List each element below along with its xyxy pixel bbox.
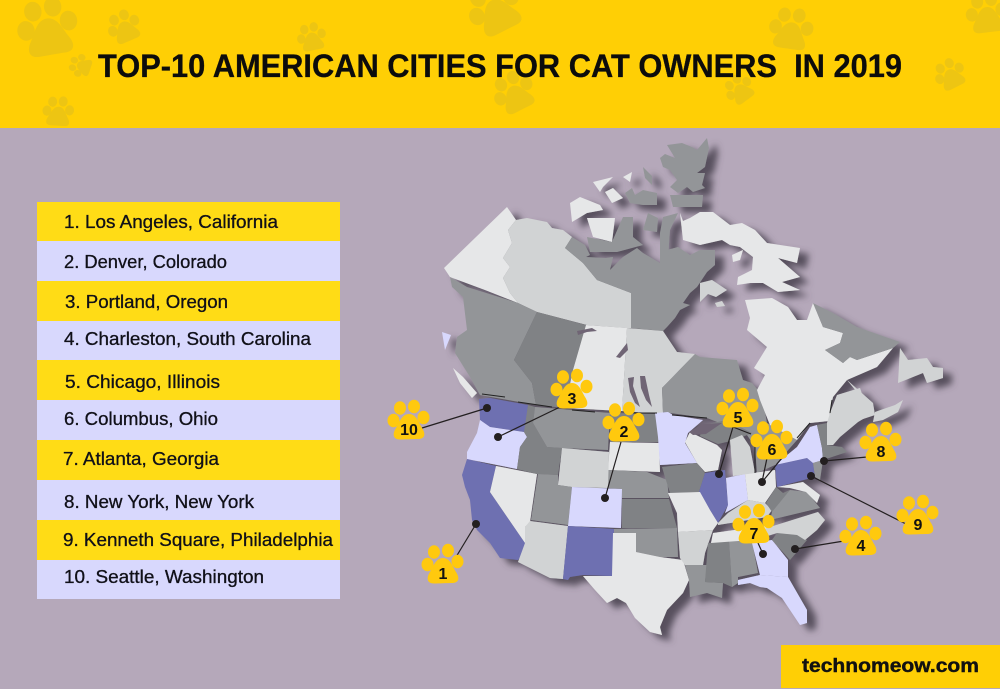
paw marker 2 — [602, 402, 644, 442]
ranking list panel: 9. Kenneth Square, Philadelphia — [63, 530, 334, 550]
Vancouver Island — [453, 368, 477, 398]
ranking list panel: 7. Atlanta, Georgia — [63, 449, 220, 469]
Haida Gwaii — [442, 332, 451, 350]
paw marker 9 — [896, 495, 938, 534]
ranking list panel: 2. Denver, Colorado — [64, 252, 227, 272]
location dots — [472, 404, 828, 558]
paw marker 5: 5 — [734, 410, 743, 427]
callout lines — [422, 407, 906, 557]
paw marker 5 — [716, 388, 758, 428]
US central and eastern states — [655, 380, 903, 625]
paw marker 8: 8 — [877, 444, 886, 461]
paw marker 10: 10 — [400, 422, 418, 439]
paw marker 3 — [550, 369, 592, 408]
US western states — [462, 398, 689, 635]
map of Canada and the USA — [442, 138, 943, 635]
paw marker 7: 7 — [750, 526, 759, 543]
ranking list panel: 3. Portland, Oregon — [65, 292, 228, 312]
ranking list panel: 1. Los Angeles, California — [64, 212, 279, 232]
paw marker 4: 4 — [857, 538, 866, 555]
header band — [0, 0, 1000, 128]
title: TOP-10 AMERICAN CITIES FOR CAT OWNERS IN 2019 — [98, 48, 902, 84]
Arctic islands — [570, 138, 800, 307]
ranking list panel: 8. New York, New York — [64, 492, 255, 512]
international border line — [482, 394, 832, 473]
paw marker 6 — [750, 420, 792, 460]
footer brand badge: technomeow.com — [802, 656, 979, 677]
paw marker 6: 6 — [768, 442, 777, 459]
ranking list panel: 4. Charleston, South Carolina — [64, 329, 312, 349]
ranking list panel: 5. Chicago, Illinois — [65, 372, 220, 392]
lakes — [577, 328, 722, 435]
paw marker 1: 1 — [439, 566, 448, 583]
ranking list panel — [37, 202, 340, 599]
paw marker 7 — [732, 504, 774, 544]
paw marker 10 — [388, 400, 430, 440]
paw marker 3: 3 — [568, 391, 577, 408]
ranking list panel: 6. Columbus, Ohio — [64, 409, 218, 429]
paw marker 9: 9 — [914, 517, 923, 534]
paw marker 8 — [860, 422, 902, 462]
paw marker 4 — [840, 516, 882, 556]
ranking list panel: 10. Seattle, Washington — [64, 567, 264, 587]
paw marker 1 — [422, 544, 464, 584]
paw marker 2: 2 — [620, 424, 629, 441]
footer brand badge — [781, 645, 1000, 688]
Canadian territories and provinces — [444, 207, 943, 473]
